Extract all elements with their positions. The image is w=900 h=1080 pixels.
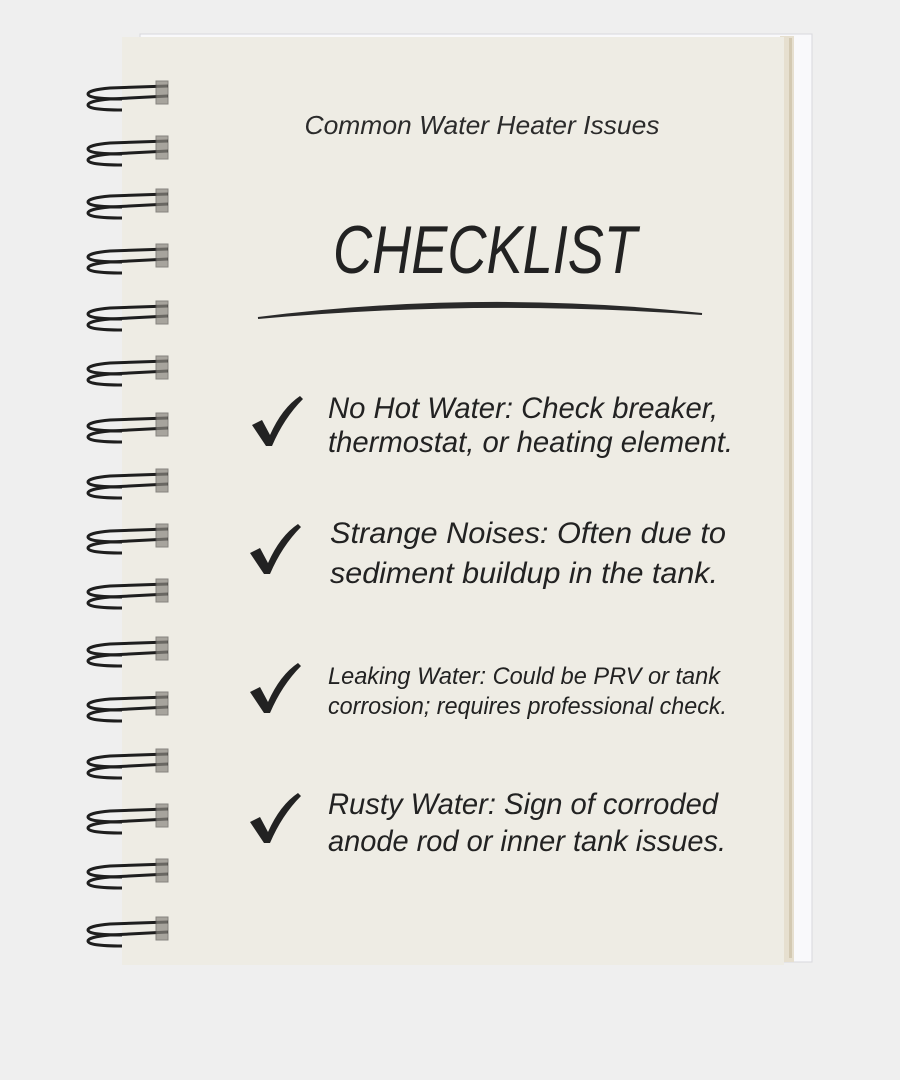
item: strange noises	[250, 517, 726, 590]
spiral binding	[88, 81, 168, 946]
item: no hot water: thermostat, or heating element.	[328, 426, 733, 459]
heading: CHECKLIST: CHECKLIST	[333, 212, 641, 288]
underline	[258, 303, 702, 318]
icon: check	[252, 396, 303, 446]
icon: check	[250, 663, 301, 713]
notebook page	[122, 37, 784, 965]
item: leaking water	[250, 663, 727, 720]
back cover	[140, 34, 812, 962]
item: no hot water	[252, 392, 733, 459]
item: rusty water	[250, 788, 726, 858]
title: Common Water Heater Issues	[304, 110, 660, 140]
item: strange noises: Strange Noises: Often due to	[330, 517, 726, 550]
item: leaking water: corrosion; requires professional check.	[328, 693, 727, 720]
item: rusty water: anode rod or inner tank issues.	[328, 825, 726, 858]
icon: check	[250, 793, 301, 843]
item: leaking water: Leaking Water: Could be PRV or tank	[328, 663, 722, 690]
icon: check	[250, 524, 301, 574]
item: strange noises: sediment buildup in the tank.	[330, 557, 718, 590]
item: rusty water: Rusty Water: Sign of corroded	[328, 788, 719, 821]
item: no hot water: No Hot Water: Check breaker,	[328, 392, 718, 425]
